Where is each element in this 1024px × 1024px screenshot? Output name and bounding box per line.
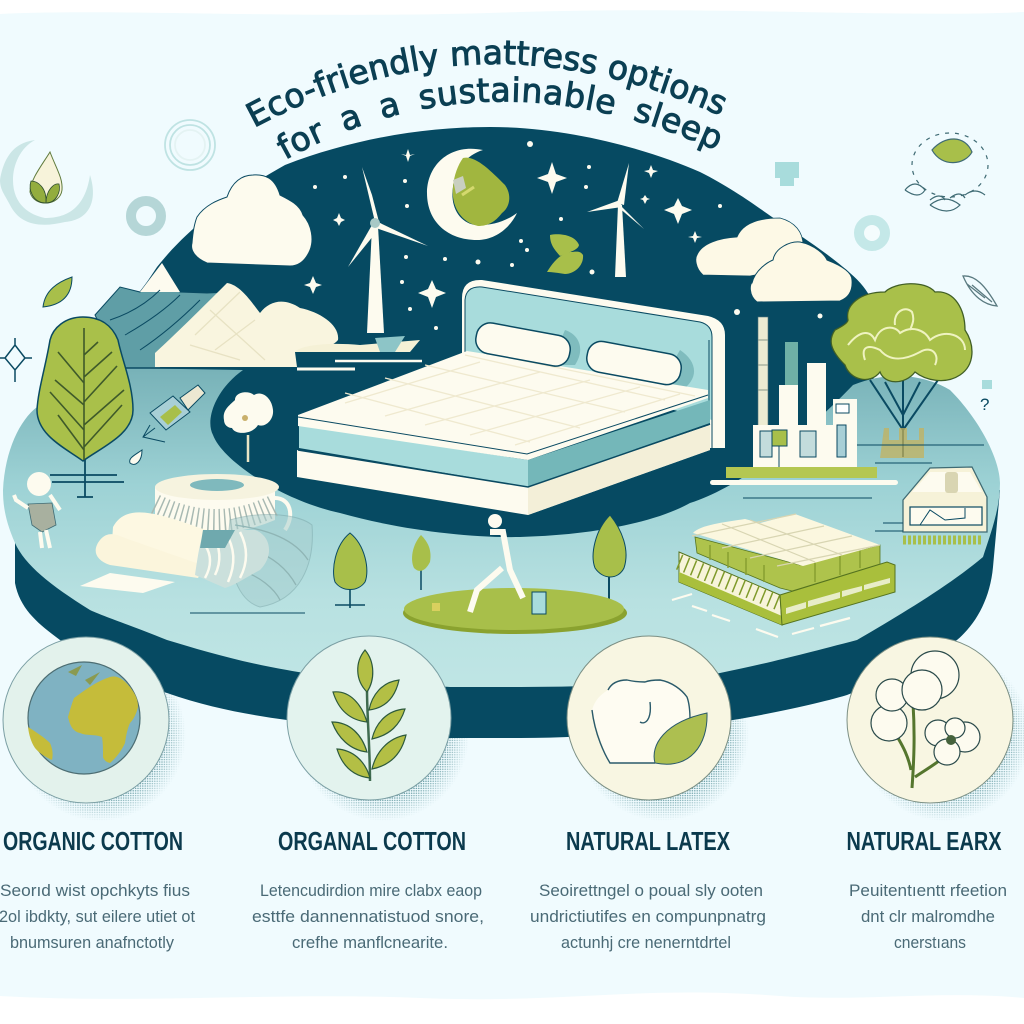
label: organic cotton: Seorıd wist opchkyts fius [0, 881, 190, 900]
pillow 1 [473, 321, 573, 368]
label: organic cotton: ORGANIC COTTON [3, 826, 183, 856]
label: organal cotton [252, 826, 484, 952]
syringe and bottle [130, 385, 205, 464]
pillow 2 [584, 339, 684, 387]
stars [294, 141, 822, 330]
small leaf upper left [43, 277, 72, 307]
label: natural latex: Seoirettngel o poual sly ooten [539, 881, 763, 900]
outline sketch upper right [905, 133, 988, 211]
small house [875, 467, 987, 540]
label: natural earx: Peuitentıentt rfeetion [849, 881, 1007, 900]
mountains and fabric hills [95, 263, 422, 369]
moon [427, 149, 517, 240]
quilting [345, 355, 695, 445]
circle: plant [287, 636, 451, 800]
factory [710, 317, 898, 498]
wind turbine right [587, 163, 644, 277]
base [297, 425, 710, 515]
road dashes [672, 594, 850, 637]
pillow shadows [550, 330, 694, 388]
toaster icon [775, 162, 799, 186]
teal layer [299, 425, 528, 487]
label: natural latex: NATURAL LATEX [566, 826, 731, 856]
ring decoration left [131, 201, 161, 231]
label: natural earx: cnerstıans [894, 933, 966, 952]
small trees [334, 515, 626, 608]
mattress top [298, 351, 708, 460]
leaf in the sky [547, 234, 583, 274]
label: organal cotton: esttfe dannennatistuod snore, [252, 907, 484, 926]
wind turbine left [348, 167, 428, 333]
circle: globe [3, 637, 169, 803]
platform dark base [3, 490, 1000, 738]
crossing star left [0, 338, 32, 382]
title: Eco-friendly mattress options [245, 40, 726, 127]
circle: cotton ball and leaf [567, 636, 731, 800]
cotton plant small [224, 392, 273, 462]
drop icon upper left [0, 140, 93, 225]
frame right face [780, 562, 895, 625]
halftone shadows under circles [32, 670, 1024, 820]
bed [297, 280, 725, 515]
ring near clouds [859, 220, 885, 246]
tree left [37, 317, 133, 497]
light teal ground [3, 368, 1000, 687]
label: organal cotton: Letencudirdion mire clabx eaop [260, 881, 482, 900]
cloud left [192, 175, 312, 266]
label: natural earx: dnt clr malromdhe [861, 907, 995, 926]
label: natural latex: actunhj cre nenerntdrtel [561, 933, 731, 952]
label: natural latex: undrictiutifes en compunpnatrg [530, 907, 766, 926]
question mark sign: ? [980, 395, 989, 414]
cotton rolls [80, 474, 312, 613]
pods [695, 537, 880, 591]
headboard [462, 280, 725, 448]
frame left face [679, 552, 782, 625]
label: organic cotton: bnumsuren anafnctotly [10, 933, 174, 952]
label: organal cotton: crefhe manflcnearite. [292, 933, 448, 952]
person left [14, 472, 60, 548]
feather icon right [963, 276, 997, 306]
clouds right [696, 218, 852, 302]
swirl decoration [165, 120, 215, 170]
circle: cotton flower [847, 637, 1013, 803]
label: organic cotton: 2ol ibdkty, sut eilere utiet ot [0, 907, 195, 926]
green disc and runner [403, 514, 627, 634]
cream top [693, 514, 880, 566]
label: natural earx [846, 826, 1007, 952]
question mark sign [980, 380, 992, 414]
label: natural latex [530, 826, 766, 952]
night sky [120, 127, 880, 520]
title: for a a sustainable sleep [276, 76, 720, 159]
label: organal cotton: ORGANAL COTTON [278, 826, 466, 856]
tree right [831, 284, 984, 463]
latex block [672, 514, 895, 637]
label: organic cotton [0, 826, 195, 952]
